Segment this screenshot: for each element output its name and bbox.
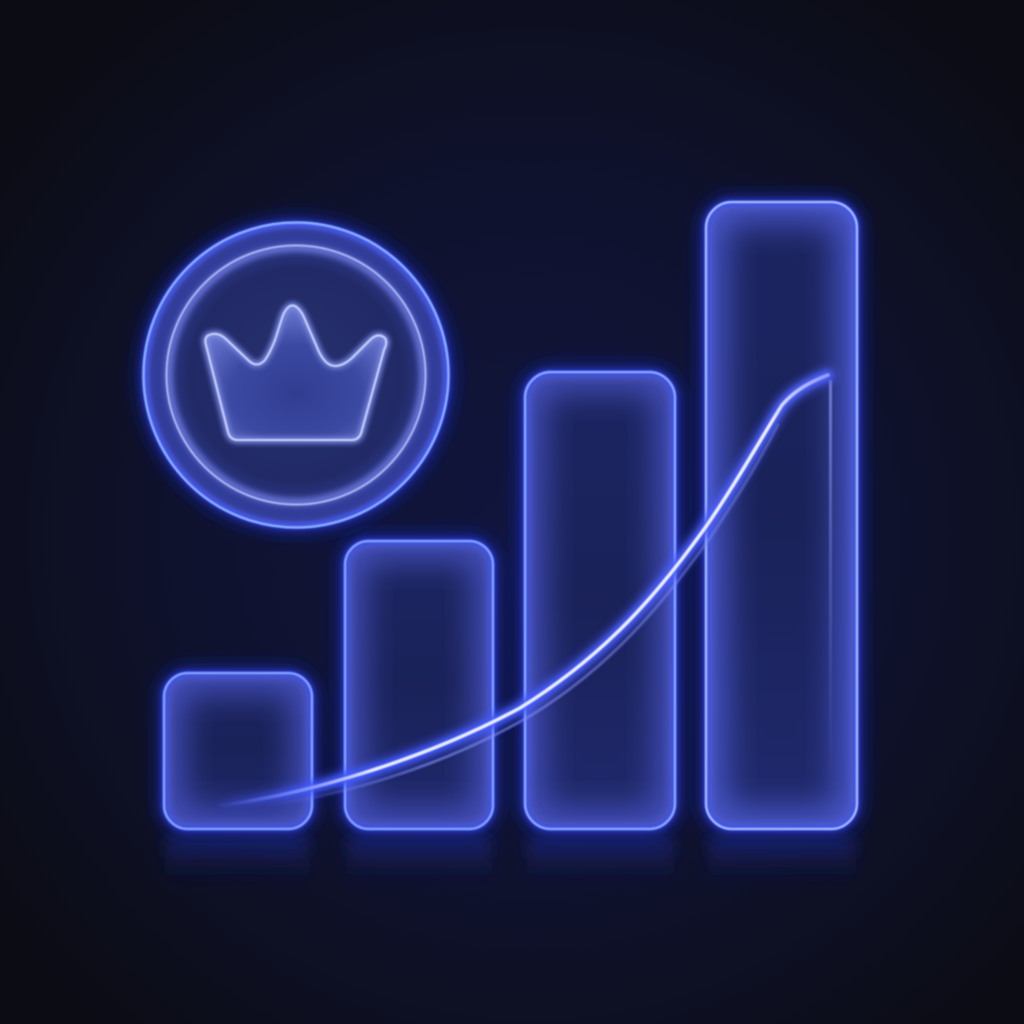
floor reflections [165, 838, 856, 888]
icon: crown [205, 306, 386, 440]
bar 1 [164, 673, 312, 829]
icon: crown badge [144, 222, 448, 528]
bar 2 [345, 541, 493, 829]
bar chart [164, 202, 857, 829]
bar 3 [525, 372, 675, 829]
bar 4 [706, 202, 857, 829]
growth curve [215, 375, 828, 806]
